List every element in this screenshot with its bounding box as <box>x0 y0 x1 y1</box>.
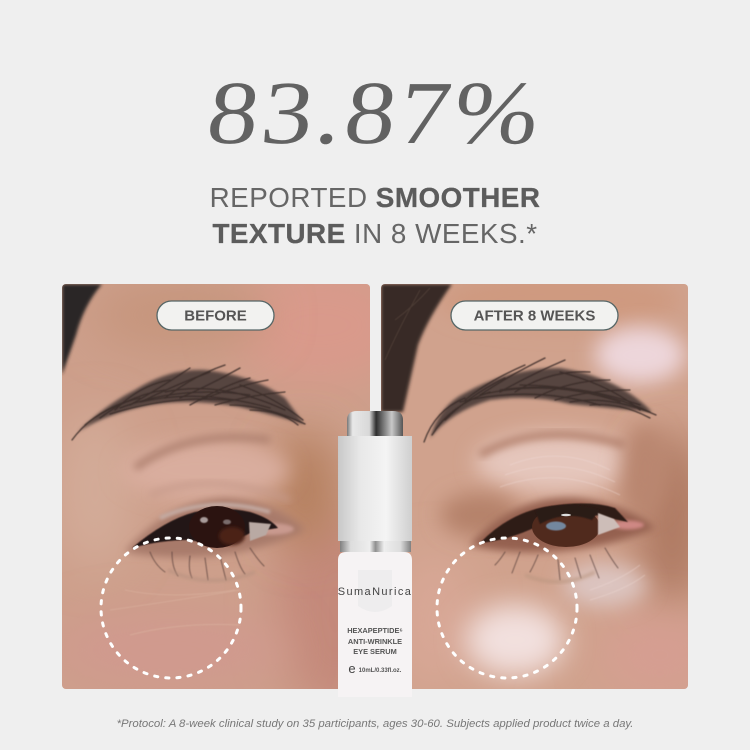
title: 83.87%: 83.87% <box>202 64 548 163</box>
subtitle: REPORTED SMOOTHER <box>210 182 540 213</box>
product: serum bottle: ANTI-WRINKLE <box>348 637 402 646</box>
label: before: BEFORE <box>184 308 247 324</box>
product: serum bottle <box>338 411 412 697</box>
before and after graphic <box>62 284 688 689</box>
eye <box>125 498 305 581</box>
bottle body <box>338 552 412 697</box>
hair <box>62 284 102 375</box>
dashed circle: before <box>101 538 241 678</box>
label: before <box>157 301 274 330</box>
product: serum bottle: EYE SERUM <box>353 647 397 656</box>
subtitle <box>210 182 540 249</box>
wrinkles <box>133 590 235 634</box>
product: serum bottle: HEXAPEPTIDE⁶ <box>347 626 403 635</box>
product: serum bottle: 10mL/0.33fl.oz. <box>359 668 402 674</box>
panel: after photo <box>381 284 688 689</box>
footnote: *Protocol: A 8-week clinical study on 35 participants, ages 30-60. Subjects applied product twice a day. <box>117 718 633 730</box>
subtitle: TEXTURE IN 8 WEEKS.* <box>212 218 538 249</box>
bottle cap <box>347 411 403 436</box>
dashed circle: after <box>437 538 577 678</box>
label: after 8 weeks <box>451 301 618 330</box>
eyebrow <box>72 365 305 440</box>
hair <box>381 284 452 412</box>
wrinkles <box>500 456 645 600</box>
eyebrow <box>424 358 656 442</box>
label: after 8 weeks: AFTER 8 WEEKS <box>474 308 595 324</box>
product: serum bottle: e <box>348 661 356 676</box>
panel: before photo <box>62 284 370 689</box>
eye <box>470 498 655 582</box>
bottle text: SumaNurica <box>338 586 412 598</box>
metal ring <box>340 541 411 552</box>
bottle collar <box>338 436 412 541</box>
